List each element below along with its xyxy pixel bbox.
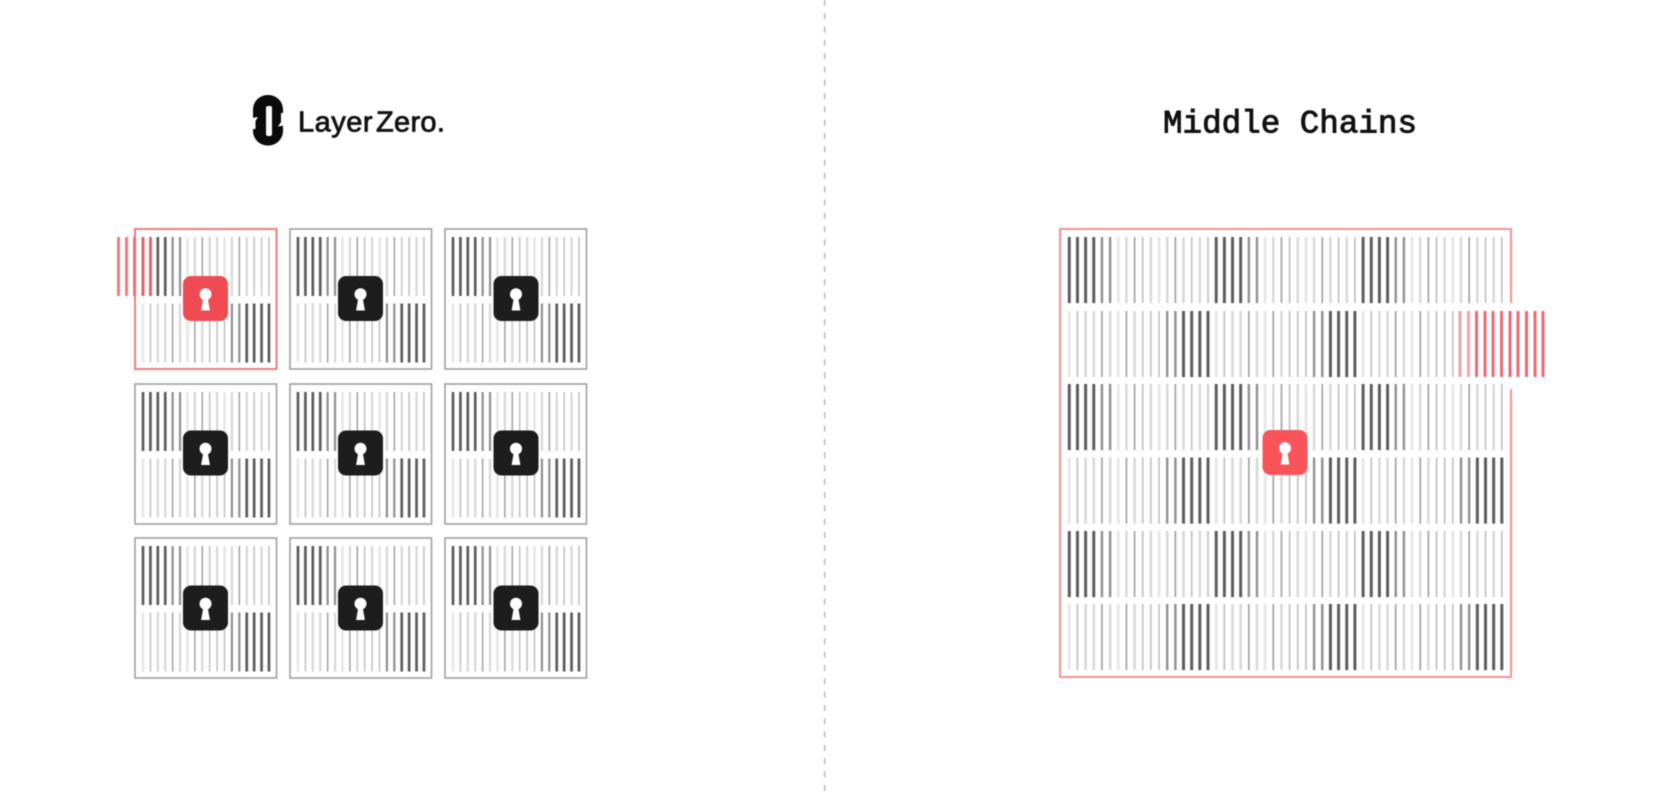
- red outline with gap: [1060, 229, 1511, 677]
- heading: Middle Chains: Middle Chains: [1163, 106, 1417, 142]
- red attack bars: [118, 237, 150, 296]
- logo wordmark: Layer: [298, 106, 373, 138]
- cell 8: [290, 538, 432, 678]
- shared security block bars: [1069, 237, 1502, 670]
- cell 2: [290, 229, 432, 369]
- panel: LayerZero: [118, 95, 586, 678]
- icon: LayerZero mark: [252, 95, 284, 146]
- cell 1: compromised: [118, 229, 276, 369]
- grid of nine locked cells: [118, 229, 586, 678]
- icon: red lock: [183, 276, 228, 321]
- icon: red lock: [1262, 430, 1308, 475]
- cell 6: [445, 384, 586, 524]
- heading: LayerZero logo: [252, 95, 445, 146]
- panel: Middle Chains: [1060, 106, 1543, 677]
- red attack bars: [1456, 309, 1543, 379]
- cell 9: [445, 538, 586, 678]
- cell 3: [445, 229, 586, 369]
- logo wordmark: Zero.: [376, 106, 445, 138]
- cell 4: [135, 384, 276, 524]
- cell 7: [135, 538, 276, 678]
- center dashed divider: [824, 0, 826, 797]
- cell 5: [290, 384, 432, 524]
